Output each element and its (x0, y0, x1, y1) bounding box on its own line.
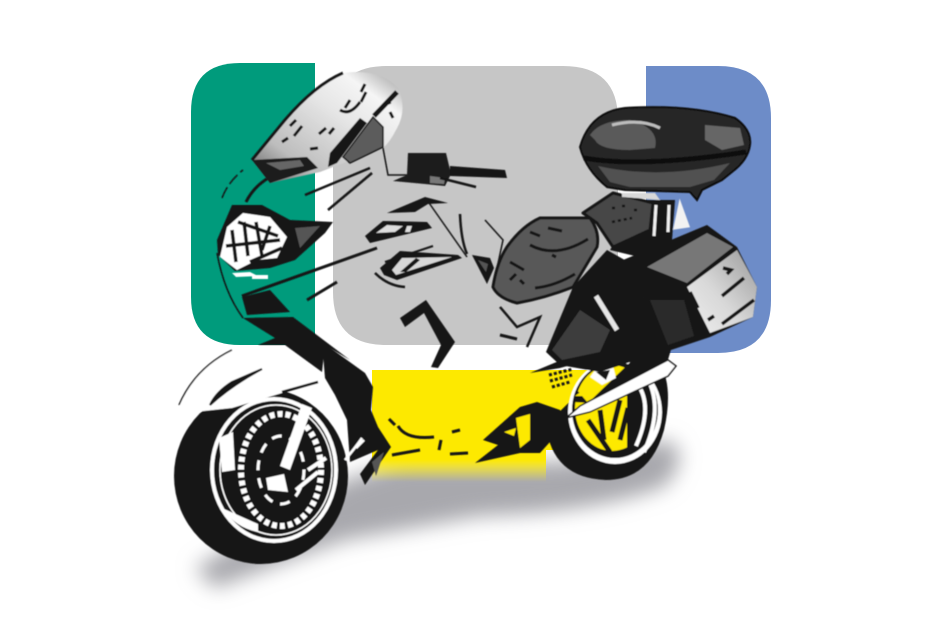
panel: grey block (333, 66, 618, 345)
seat bag front (493, 218, 598, 303)
central frame (546, 200, 675, 372)
fairing contour lines (217, 168, 377, 318)
engine (475, 343, 673, 463)
panel: blue block (646, 66, 771, 353)
front mudguard (179, 347, 322, 413)
front wheel (174, 388, 348, 564)
top box (580, 107, 750, 200)
seat bag rear (583, 193, 653, 247)
lower fairing and fork (243, 317, 391, 485)
rear wheel (546, 360, 668, 480)
ground shadow (195, 440, 679, 588)
illustration: motorcycle on colour blocks (173, 63, 771, 597)
pannier (623, 225, 757, 352)
panel: green block (191, 63, 315, 345)
nose panel (242, 290, 290, 315)
luggage struts (654, 204, 688, 236)
motorcycle (174, 72, 757, 564)
handlebar and mirror stem (383, 148, 507, 187)
lower marks (389, 300, 540, 455)
exhaust (566, 360, 676, 418)
tank line work (365, 197, 503, 287)
headlight (217, 205, 333, 279)
panel: yellow block (372, 370, 628, 482)
windscreen (252, 72, 403, 183)
